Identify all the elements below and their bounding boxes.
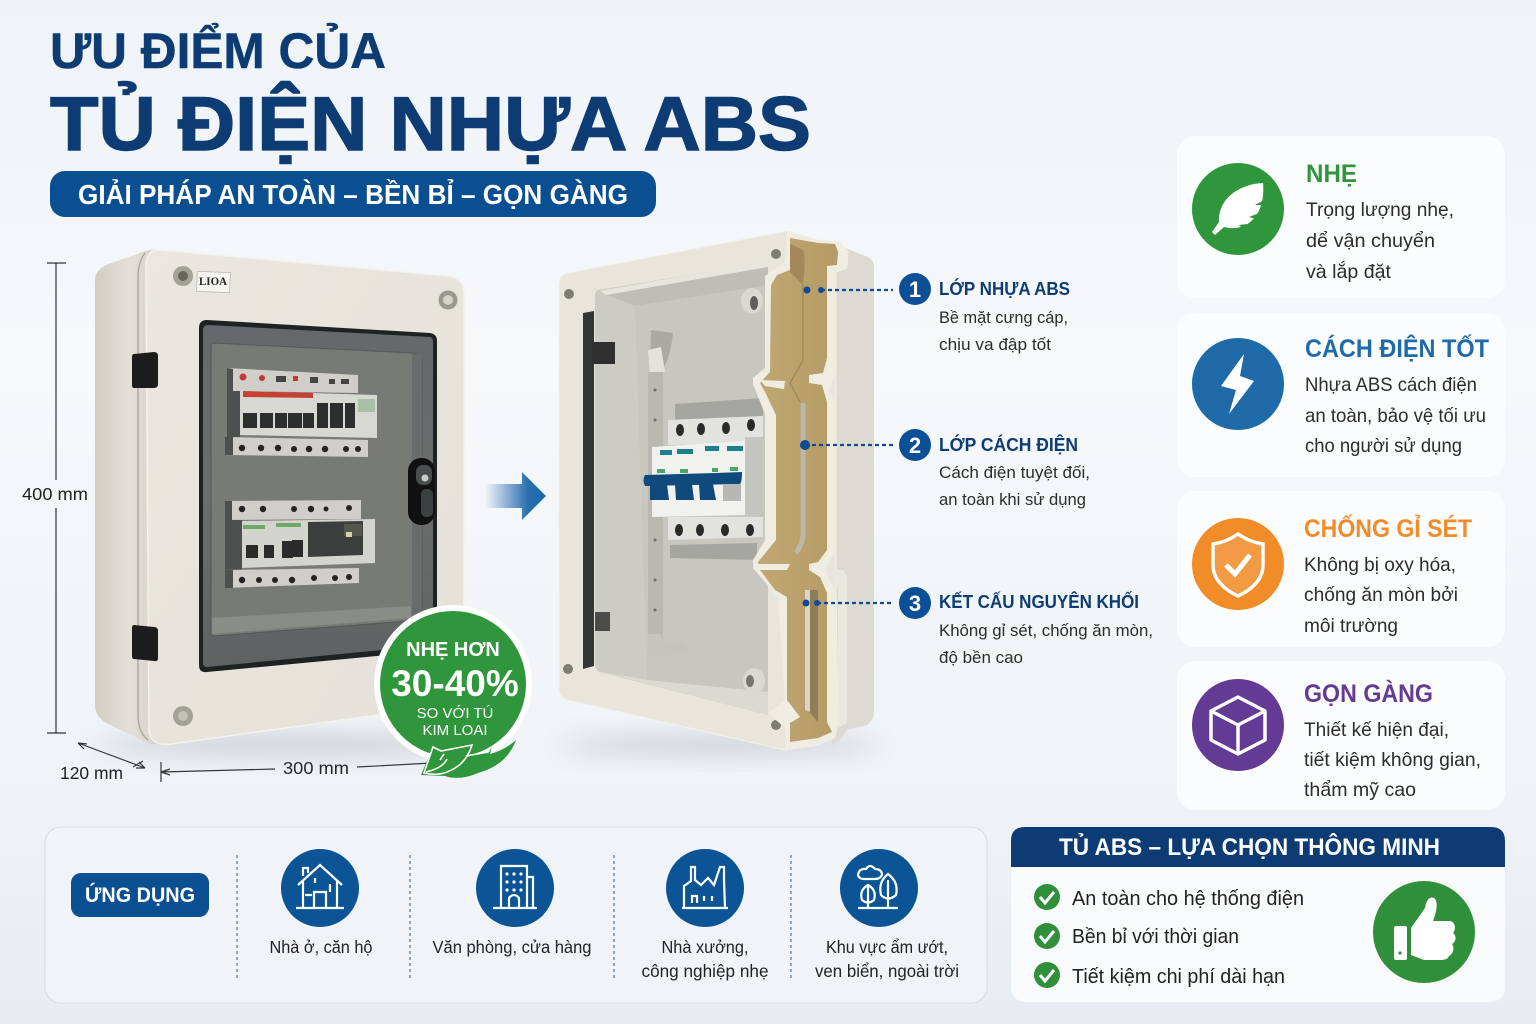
hinge lower <box>595 612 610 631</box>
callout 3: 3 <box>909 591 921 616</box>
callout 1 <box>899 273 1070 354</box>
interior left wall <box>595 262 768 715</box>
mounting bosses <box>741 288 765 694</box>
leaves <box>421 740 516 778</box>
callout 2 <box>899 429 1090 509</box>
application: humid outdoor: Khu vực ẩm ướt, <box>826 937 948 957</box>
application: humid outdoor: ven biển, ngoài trời <box>815 961 959 981</box>
light divider strip <box>796 403 803 553</box>
cream bridges <box>755 380 790 570</box>
panel: compact: tiết kiệm không gian, <box>1304 749 1481 771</box>
badge text: SO VỚI TÚ <box>417 705 493 722</box>
application: office <box>432 849 592 957</box>
panel: light weight: NHẸ <box>1306 160 1357 188</box>
screws <box>173 266 458 726</box>
smart choice header: TỦ ABS – LỰA CHỌN THÔNG MINH <box>1059 832 1440 861</box>
corner screw holes <box>563 249 781 730</box>
panel: compact: thẩm mỹ cao <box>1304 779 1416 801</box>
lower channel <box>805 590 818 722</box>
panel: good insulation: CÁCH ĐIỆN TỐT <box>1305 333 1489 363</box>
panel: rust proof: chống ăn mòn bởi <box>1304 584 1458 606</box>
title <box>50 22 811 167</box>
blue circuit breaker <box>644 416 763 540</box>
cabinet frame <box>559 231 848 750</box>
window frame <box>199 320 437 672</box>
cross-section cream edge <box>753 231 848 750</box>
door gasket <box>583 311 594 669</box>
din rail <box>670 398 763 560</box>
callout 3: Không gỉ sét, chống ăn mòn, <box>939 622 1153 640</box>
panel: good insulation: Nhựa ABS cách điện <box>1305 374 1477 396</box>
callout 2: Cách điện tuyệt đối, <box>939 464 1090 482</box>
title line 2: TỦ ĐIỆN NHỰA ABS <box>50 81 811 167</box>
hinge <box>592 342 615 364</box>
icon: box <box>1192 679 1284 771</box>
callout 2: an toàn khi sử dụng <box>939 491 1086 509</box>
arrow <box>485 472 546 520</box>
panel: compact: Thiết kế hiện đại, <box>1304 719 1449 741</box>
dimension lines <box>47 263 432 782</box>
subtitle pill: GIẢI PHÁP AN TOÀN – BỀN BỈ – GỌN GÀNG <box>78 178 628 210</box>
interior back plane <box>635 284 768 692</box>
cross-section tan layer <box>758 238 838 742</box>
panel: light weight: và lắp đặt <box>1306 260 1392 283</box>
applications label <box>71 873 209 917</box>
dimension label 120 mm: 120 mm <box>60 763 123 783</box>
leader lines <box>800 286 893 606</box>
panel: rust proof: CHỐNG GỈ SÉT <box>1304 513 1472 543</box>
panel: applications <box>45 827 987 1003</box>
application: factory: công nghiệp nhẹ <box>642 961 768 981</box>
panel: good insulation: an toàn, bảo vệ tối ưu <box>1305 405 1486 427</box>
application: factory: Nhà xưởng, <box>662 937 748 957</box>
panel: light weight: Trọng lượng nhẹ, <box>1306 199 1454 221</box>
callout 2: 2 <box>909 433 921 458</box>
badge: lighter by 30-40% <box>374 605 532 778</box>
callout 3: KẾT CẤU NGUYÊN KHỐI <box>939 591 1139 612</box>
interior bottom wall <box>602 672 768 715</box>
hinge top <box>132 352 158 388</box>
panel: good insulation <box>1177 313 1505 477</box>
interior top wall <box>600 262 768 306</box>
application: house: Nhà ở, căn hộ <box>270 937 372 957</box>
breaker row 1 <box>225 368 377 457</box>
badge text: KIM LOAI <box>422 722 488 739</box>
callout 3 <box>899 587 1153 667</box>
applications label: ỨNG DỤNG <box>85 883 195 907</box>
application: factory <box>642 849 768 981</box>
icon: lightning bolt <box>1192 338 1284 430</box>
badge text <box>391 639 519 739</box>
cabinet front <box>146 250 464 744</box>
door lock <box>408 458 435 525</box>
LIOA label: LIOA <box>199 274 227 288</box>
application: humid outdoor <box>815 849 959 981</box>
check item 1: An toàn cho hệ thống điện <box>1072 888 1304 910</box>
icon: thumbs up <box>1373 881 1475 983</box>
panel: compact <box>1177 661 1505 810</box>
callout 1: LỚP NHỰA ABS <box>939 278 1070 299</box>
title line 1: ƯU ĐIỂM CỦA <box>50 22 386 79</box>
callout 1: 1 <box>909 277 921 302</box>
LIOA label <box>197 271 230 293</box>
panel: smart choice <box>1011 827 1505 1002</box>
panel: rust proof: môi trường <box>1304 615 1398 637</box>
application: house <box>270 849 372 957</box>
badge text: 30-40% <box>391 663 519 704</box>
icon: feather <box>1192 163 1284 255</box>
hinge bottom <box>132 625 158 661</box>
smart choice header <box>1011 827 1505 867</box>
dimension label 300 mm: 300 mm <box>283 758 349 778</box>
application: office: Văn phòng, cửa hàng <box>432 937 592 957</box>
badge text: NHẸ HƠN <box>406 639 500 661</box>
opened cabinet cutaway <box>559 231 880 754</box>
mounting rail <box>648 330 688 656</box>
panel: rust proof: Không bị oxy hóa, <box>1304 554 1456 576</box>
back side <box>832 244 874 745</box>
callout 3: độ bền cao <box>939 649 1023 667</box>
cabinet side <box>95 250 163 744</box>
breaker row 2 <box>225 500 375 588</box>
callout 2: LỚP CÁCH ĐIỆN <box>939 434 1078 455</box>
callout 1: Bề mặt cưng cáp, <box>939 309 1068 327</box>
panel: light weight: dể vận chuyển <box>1306 230 1435 252</box>
check item 3: Tiết kiệm chi phí dài hạn <box>1072 966 1285 988</box>
check item 2: Bền bỉ với thời gian <box>1072 926 1239 948</box>
callout 1: chịu va đập tốt <box>939 336 1051 354</box>
window glass <box>203 325 433 667</box>
inner recess <box>211 343 422 636</box>
dimension label 400 mm: 400 mm <box>22 484 88 504</box>
panel: compact: GỌN GÀNG <box>1304 679 1433 708</box>
closed ABS cabinet <box>95 250 475 755</box>
check item 2 <box>1034 923 1239 949</box>
subtitle pill <box>50 171 656 217</box>
panel: light weight <box>1177 136 1505 298</box>
chamber shading <box>790 244 804 285</box>
icon: shield <box>1192 518 1284 610</box>
panel: good insulation: cho người sử dụng <box>1305 435 1462 457</box>
panel: rust proof <box>1177 491 1505 647</box>
